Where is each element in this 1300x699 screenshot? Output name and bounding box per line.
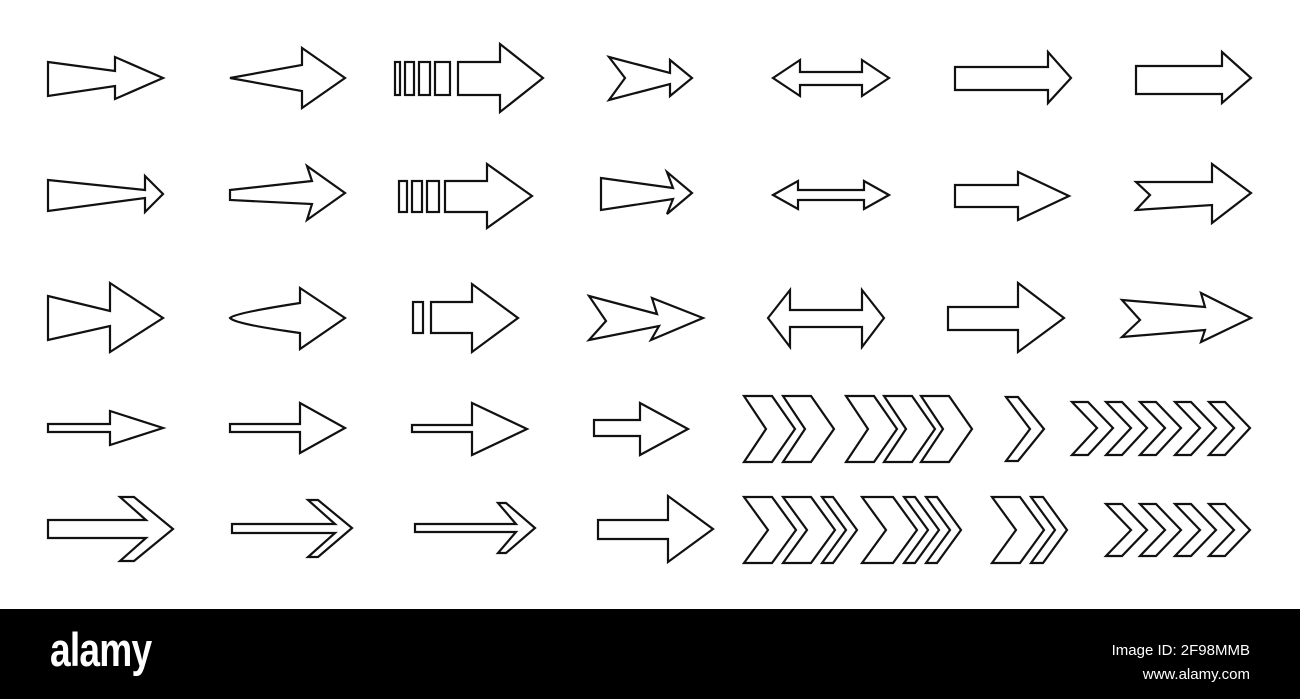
image id text: Image ID: 2F98MMB <box>1112 642 1250 659</box>
chevron groups row 4 <box>744 396 1250 462</box>
row 1 arrows <box>48 44 1251 112</box>
row 5 arrows <box>48 496 713 562</box>
row 3 arrows <box>48 283 1251 352</box>
chevron groups row 5 <box>744 497 1250 563</box>
row 4 arrows <box>48 403 688 455</box>
image id text <box>1112 642 1250 683</box>
logo text: alamy <box>50 623 151 676</box>
row 2 arrows <box>48 164 1251 228</box>
image id text: www.alamy.com <box>1143 666 1250 683</box>
watermark footer bar <box>0 609 1300 699</box>
